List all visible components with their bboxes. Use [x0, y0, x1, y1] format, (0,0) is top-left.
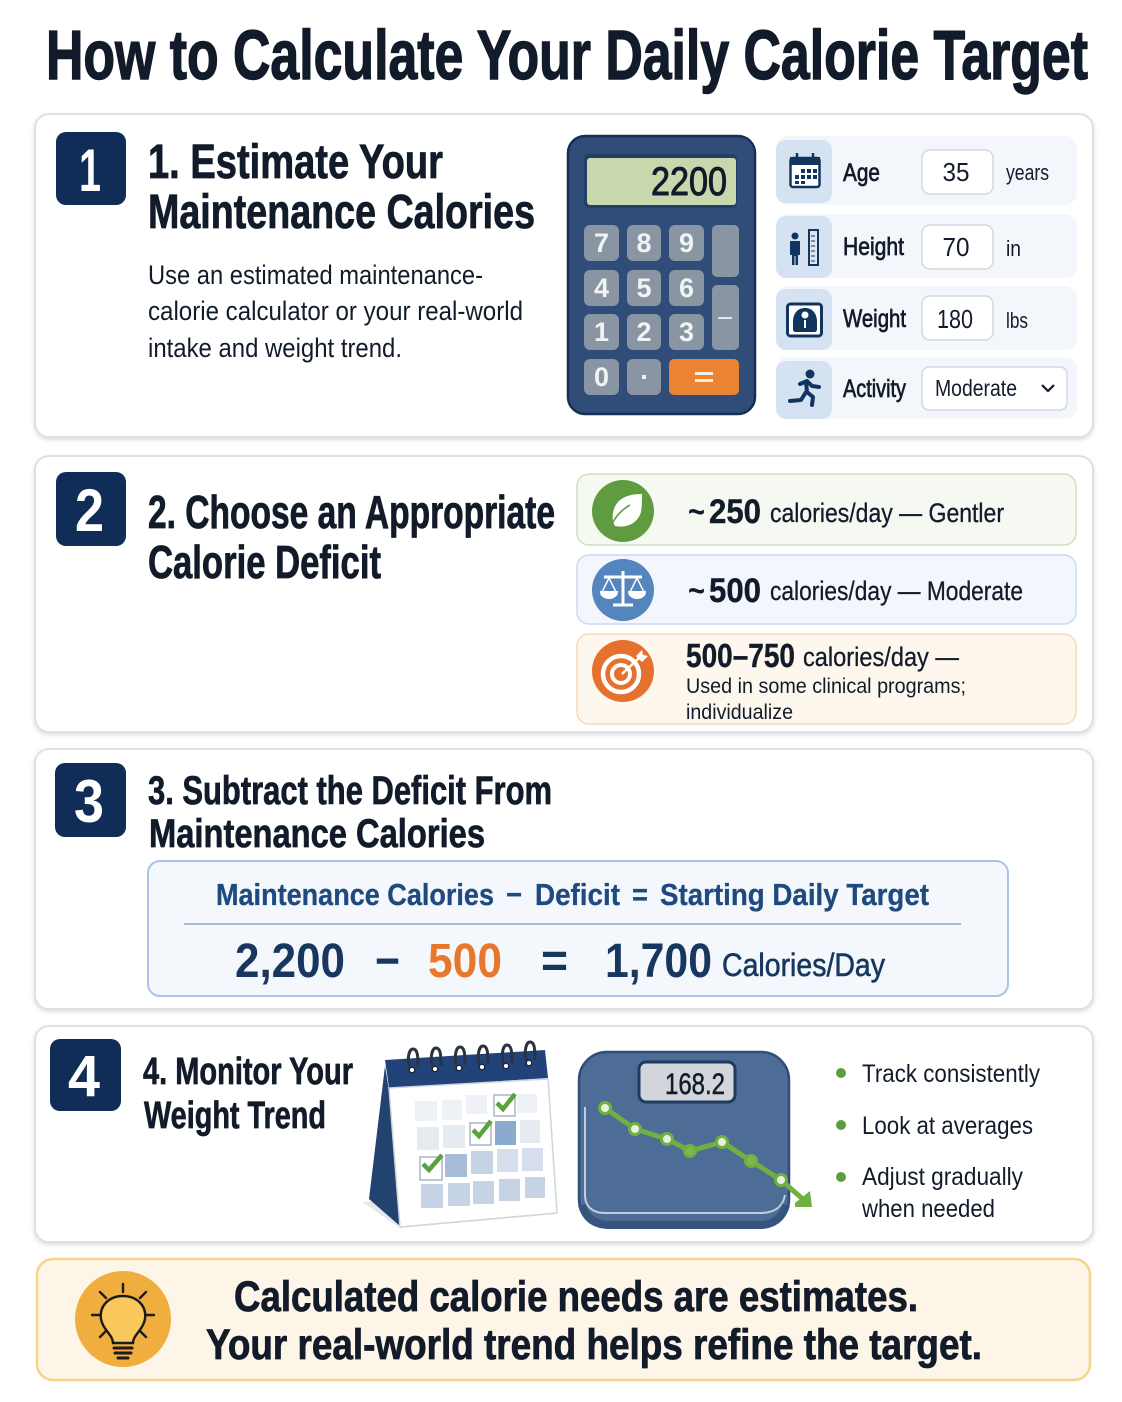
icon: person with ruler [790, 230, 818, 265]
option: 500-750 calories clinical: individualize [686, 701, 793, 724]
step 1 badge: 1 [79, 137, 101, 204]
calculator: 2200 [651, 160, 727, 204]
field: weight: lbs [1006, 308, 1028, 333]
option: 500-750 calories clinical: Used in some clinical programs; [686, 675, 966, 698]
step 2 heading [148, 486, 555, 588]
checklist [836, 1060, 1040, 1223]
step 1 heading: 1. Estimate Your [148, 136, 443, 189]
step 4 badge: 4 [68, 1044, 100, 1109]
field: activity: Moderate [935, 375, 1017, 401]
icon: balance scale [601, 571, 645, 605]
icon: bathroom scale with trend line [579, 1052, 812, 1227]
step 4 heading: Weight Trend [144, 1095, 326, 1137]
calculator: 9 [679, 228, 694, 258]
option: 500-750 calories clinical: 500–750 [686, 637, 795, 674]
formula box: 500 [428, 935, 502, 988]
step 1 heading [148, 136, 535, 239]
panel: step 1 estimate maintenance calories [35, 114, 1093, 437]
calculator: 8 [636, 228, 652, 258]
checklist: Look at averages [862, 1112, 1033, 1140]
icon: light bulb [92, 1284, 154, 1358]
formula box [148, 861, 1008, 996]
icon: runner [790, 370, 819, 405]
option: 250 calories gentler [577, 474, 1076, 545]
callout: estimates note: Your real-world trend helps refine the target. [206, 1321, 982, 1369]
icon: calendar with check marks [362, 1042, 557, 1228]
option: 500 calories moderate: ~ [688, 572, 705, 610]
formula box: Maintenance Calories [216, 877, 494, 912]
step 3 heading [148, 769, 552, 856]
step 1 heading: Maintenance Calories [148, 186, 535, 239]
callout: estimates note: Calculated calorie needs are estimates. [234, 1273, 918, 1321]
field: activity [776, 357, 1077, 419]
step 1 body text [148, 260, 523, 363]
formula box: = [541, 935, 568, 988]
option: 250 calories gentler: ~ [688, 493, 705, 531]
step 4 heading [143, 1051, 353, 1137]
calculator: 2 [636, 317, 652, 347]
panel: step 4 monitor trend [35, 1026, 1093, 1242]
step 4 badge [50, 1039, 121, 1111]
checklist: when needed [861, 1195, 995, 1223]
option: 500 calories moderate [577, 555, 1076, 624]
formula box: Starting Daily Target [660, 877, 929, 912]
field: age: 35 [942, 157, 970, 187]
step 1 body text: intake and weight trend. [148, 333, 402, 363]
field: height [776, 214, 1077, 278]
field: weight [776, 286, 1077, 350]
field: activity: Activity [843, 375, 906, 403]
option: 500 calories moderate: calories/day — Moderate [770, 576, 1023, 606]
option: 500 calories moderate: 500 [709, 572, 761, 610]
panel: step 2 choose deficit [35, 456, 1093, 732]
step 1 body text: calorie calculator or your real-world [148, 296, 523, 326]
field: age [776, 136, 1077, 205]
step 1 body text: Use an estimated maintenance- [148, 260, 483, 290]
step 2 heading: 2. Choose an Appropriate [148, 486, 555, 538]
field: age: Age [843, 159, 880, 187]
calculator: 4 [594, 273, 609, 303]
step 3 badge: 3 [74, 768, 104, 835]
icon: leaf [610, 494, 642, 529]
field: height: 70 [942, 232, 970, 262]
panel: step 3 subtract deficit [35, 749, 1093, 1009]
formula box: Calories/Day [722, 947, 885, 983]
calculator: 3 [679, 317, 694, 347]
option: 250 calories gentler: calories/day — Gentler [770, 498, 1004, 528]
icon: target [603, 650, 648, 692]
step 2 badge: 2 [75, 477, 104, 544]
checklist: Track consistently [862, 1060, 1040, 1088]
step 3 badge [55, 763, 126, 837]
formula box: 1,700 [605, 935, 712, 988]
field: age: years [1006, 160, 1049, 185]
step 2 heading: Calorie Deficit [148, 536, 381, 588]
formula box: − [506, 877, 522, 912]
field: weight: Weight [843, 305, 906, 333]
option: 500-750 calories clinical [577, 634, 1076, 724]
checklist: Adjust gradually [862, 1163, 1023, 1191]
icon: scale [788, 304, 822, 336]
calculator: 5 [636, 273, 652, 303]
step 3 heading: Maintenance Calories [149, 812, 485, 856]
step 4 heading: 4. Monitor Your [143, 1051, 353, 1093]
option: 250 calories gentler: 250 [709, 493, 761, 531]
callout: estimates note [37, 1259, 1090, 1380]
formula box: Deficit [535, 877, 620, 912]
field: weight: 180 [937, 304, 973, 334]
step 1 badge [56, 132, 126, 205]
icon: calendar [790, 153, 820, 187]
formula box: 2,200 [235, 935, 345, 988]
formula box: − [375, 935, 400, 988]
calculator [568, 136, 755, 414]
formula box: = [632, 877, 648, 912]
calculator: 6 [679, 273, 694, 303]
field: height: Height [843, 233, 904, 261]
step 2 badge [56, 472, 126, 546]
calculator: 0 [594, 362, 609, 392]
calculator: 1 [594, 317, 609, 347]
field: height: in [1006, 236, 1021, 261]
option: 500-750 calories clinical: calories/day — [803, 642, 959, 672]
calculator: 7 [594, 228, 609, 258]
step 3 heading: 3. Subtract the Deficit From [148, 769, 552, 813]
icon: bathroom scale with trend line: 168.2 [665, 1068, 725, 1101]
